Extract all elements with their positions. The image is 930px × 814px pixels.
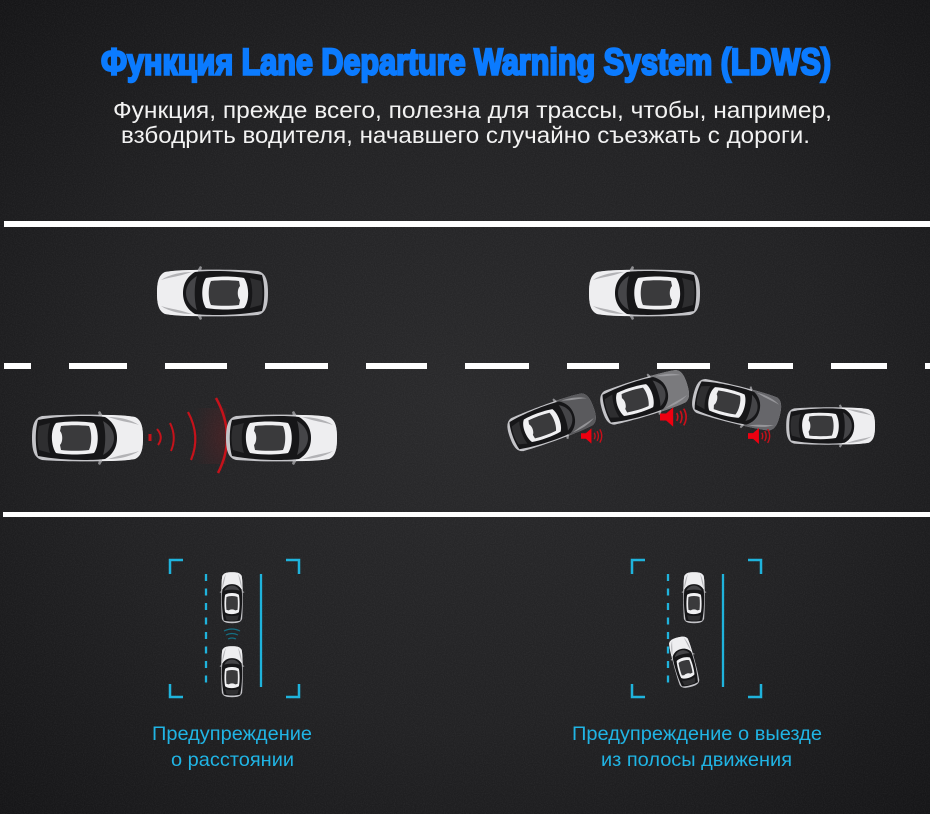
car: top mini [682,572,706,623]
car: top mini [220,572,244,623]
car: departing 2 [596,363,693,431]
road edge top [4,221,930,227]
road diagram [3,221,930,517]
car: bottom mini [220,646,244,697]
caption [152,723,312,771]
car: top left [157,266,268,320]
icon: warning speaker 1 [581,428,602,444]
caption: Предупреждение [152,723,312,745]
caption: Предупреждение о выезде [572,723,822,745]
car: rear, distance scene [32,411,143,465]
lane lines [206,574,261,687]
lane dashes [4,363,930,369]
intro text: Функция, прежде всего, полезна для трассы, чтобы, например, [113,97,832,123]
icon: warning speaker 3 [748,428,770,444]
car: departing 3 [688,373,785,437]
panel: distance warning [152,560,312,771]
intro text [113,97,832,148]
viewfinder brackets [632,560,761,697]
caption: из полосы движения [601,749,792,771]
lane lines [668,574,723,687]
car: front, distance scene [226,411,337,465]
road edge bottom [3,512,930,517]
car: top right [589,266,700,320]
icon: warning speaker 2 [660,407,686,427]
car: drifting mini [665,634,703,690]
caption [572,723,822,771]
car: back in lane [786,404,875,448]
lane departure sequence cars [503,363,875,458]
intro text: взбодрить водителя, начавшего случайно съезжать с дороги. [121,122,810,148]
red radar waves [150,398,227,473]
icon: signal waves [224,629,240,639]
viewfinder brackets [170,560,299,697]
caption: о расстоянии [171,749,294,771]
car: departing 1 [503,387,601,458]
panel: lane departure warning [572,560,822,771]
